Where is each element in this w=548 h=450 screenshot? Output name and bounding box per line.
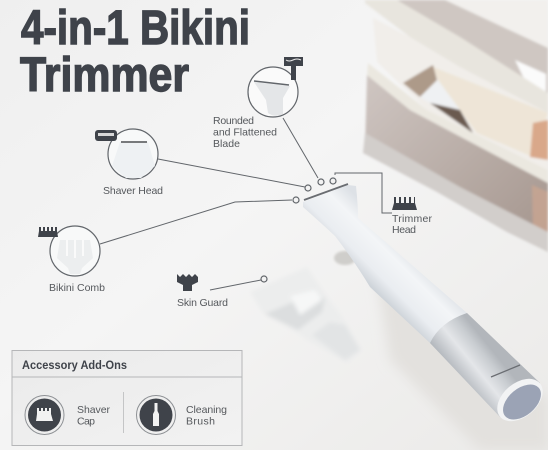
body: [303, 185, 467, 343]
callout: shaver head: [95, 129, 163, 197]
icon: shaver cap: [25, 396, 64, 434]
trimmer shadow: [334, 251, 356, 265]
title: 4-in-1 Bikini: [21, 2, 250, 55]
icon: cleaning brush: [136, 396, 176, 434]
callout: rounded and flattened blade: and Flattened: [213, 126, 277, 138]
second band: [367, 63, 548, 183]
callout: bikini comb: [38, 226, 105, 294]
panel: accessory add-ons: [12, 350, 242, 446]
title: Trimmer: [20, 49, 189, 102]
blade: [304, 184, 348, 200]
lower panel: [365, 75, 548, 252]
callout: rounded and flattened blade: Blade: [213, 138, 240, 150]
callout: skin guard: Skin Guard: [177, 297, 228, 309]
callout: trimmer head: Trimmer: [392, 213, 432, 225]
title: [20, 2, 250, 102]
trimmer: [303, 184, 548, 430]
text: shaver cap: Shaver: [77, 404, 110, 416]
icon: blade: [284, 57, 303, 80]
skin guard attachment: [250, 267, 362, 363]
first band: [365, 0, 548, 113]
silver end section: [430, 313, 540, 417]
icon: trimmer: [392, 197, 417, 210]
callout: trimmer head: [392, 197, 432, 236]
callout: bikini comb: Bikini Comb: [49, 282, 105, 294]
cosmetic bag: [363, 0, 548, 252]
callout: skin guard: [177, 274, 228, 309]
icon: shaver head: [95, 130, 117, 141]
callout dots: [261, 178, 336, 282]
icon: comb: [38, 227, 58, 237]
callout: shaver head: Shaver Head: [103, 185, 163, 197]
icon: skin guard: [177, 274, 198, 291]
text: shaver cap: Cap: [77, 416, 95, 428]
rim: [363, 133, 548, 252]
callout lines: [100, 118, 392, 290]
end cap: [489, 370, 548, 430]
interior: [373, 18, 548, 170]
gold bottle: [530, 120, 548, 160]
text: cleaning brush: Cleaning: [186, 404, 227, 416]
logo: [491, 365, 520, 377]
back of bag: [397, 0, 548, 100]
callout: rounded and flattened blade: [213, 57, 303, 150]
heading: Accessory Add-Ons: [22, 358, 127, 372]
callout: rounded and flattened blade: Rounded: [213, 115, 254, 127]
text: cleaning brush: Brush: [186, 416, 215, 428]
callout: trimmer head: Head: [392, 224, 416, 236]
